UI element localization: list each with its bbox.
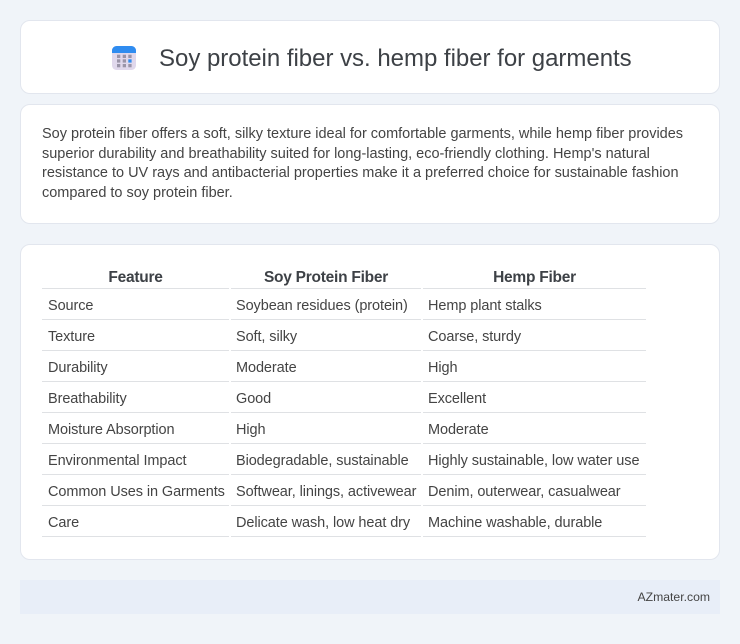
row: care: Machine washable, durable [428, 515, 602, 531]
row: common uses: Softwear, linings, activewear [236, 484, 416, 500]
footer bar: AZmater.com [638, 590, 710, 604]
intro paragraph: compared to soy protein fiber. [42, 185, 233, 201]
row: common uses: Denim, outerwear, casualwear [428, 484, 621, 500]
row: source: Soybean residues (protein) [236, 298, 408, 314]
row: breathability [48, 391, 486, 407]
row: environmental impact: Biodegradable, sustainable [236, 453, 409, 469]
row: moisture absorption: Moisture Absorption [48, 422, 174, 438]
title: Soy protein fiber vs. hemp fiber for garments [159, 45, 632, 72]
row: source: Source [48, 298, 93, 314]
intro card [20, 104, 720, 224]
row: moisture absorption: High [236, 422, 265, 438]
row: care [48, 515, 602, 531]
row: care: Care [48, 515, 79, 531]
row: common uses [48, 484, 621, 500]
row: durability [48, 360, 457, 376]
row: texture [48, 329, 522, 345]
row: durability: Durability [48, 360, 108, 376]
column headings: Soy Protein Fiber [264, 269, 388, 286]
intro paragraph: resistance to UV rays and antibacterial properties make it a preferred choice for sustainable fashion [42, 165, 679, 181]
row: texture: Coarse, sturdy [428, 329, 521, 345]
row: care: Delicate wash, low heat dry [236, 515, 410, 531]
row: breathability: Good [236, 391, 271, 407]
row: environmental impact [48, 453, 639, 469]
row: breathability: Breathability [48, 391, 127, 407]
column headings: Feature [108, 269, 163, 286]
column headings: Hemp Fiber [493, 269, 576, 286]
row: durability: High [428, 360, 457, 376]
row: texture: Soft, silky [236, 329, 297, 345]
row: moisture absorption [48, 422, 489, 438]
row: source: Hemp plant stalks [428, 298, 542, 314]
row: breathability: Excellent [428, 391, 486, 407]
row: source [48, 298, 542, 314]
icon: calendar [112, 46, 136, 70]
intro paragraph: Soy protein fiber offers a soft, silky texture ideal for comfortable garments, while hemp fiber provides [42, 126, 683, 142]
row: texture: Texture [48, 329, 95, 345]
row: environmental impact: Highly sustainable, low water use [428, 453, 639, 469]
header card [20, 20, 720, 94]
intro paragraph [42, 126, 683, 201]
row: environmental impact: Environmental Impact [48, 453, 186, 469]
column headings [108, 269, 576, 286]
footer bar [20, 580, 720, 614]
row: durability: Moderate [236, 360, 297, 376]
row: common uses: Common Uses in Garments [48, 484, 225, 500]
comparison table card [20, 244, 720, 560]
intro paragraph: superior durability and breathability suited for long-lasting, eco-friendly clothing. Hemp's natural [42, 146, 650, 162]
row: moisture absorption: Moderate [428, 422, 489, 438]
